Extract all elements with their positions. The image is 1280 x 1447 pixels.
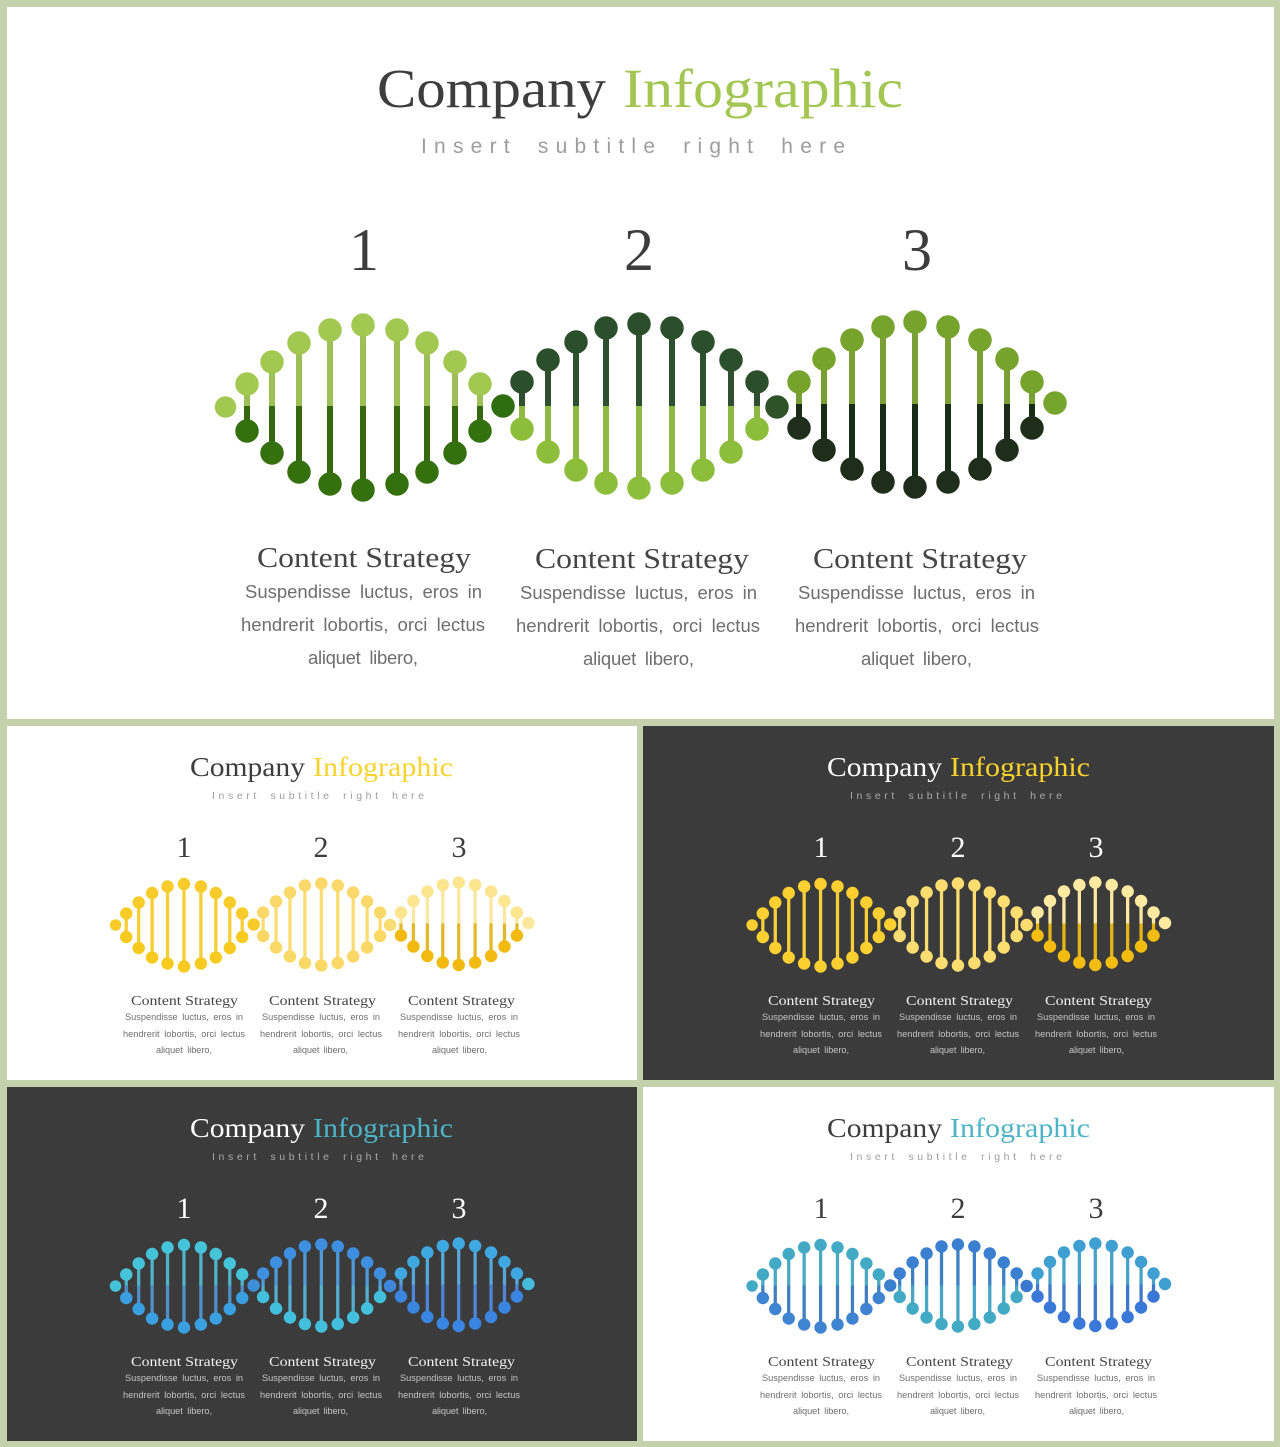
body 2: aliquet libero, [583,648,694,669]
number 1: 1 [349,217,379,283]
numbers: 3 [1088,831,1104,864]
column text: hendrerit lobortis, orci lectus [897,1029,1019,1039]
column text: hendrerit lobortis, orci lectus [398,1029,520,1039]
column text: Content Strategy [408,994,515,1009]
title: Infographic [950,751,1090,782]
numbers: 3 [1088,1192,1104,1225]
subtitle: Insert subtitle right here [850,1151,1062,1163]
column 2 text [516,544,760,669]
column text: Content Strategy [768,994,875,1009]
body 1: aliquet libero, [308,647,418,668]
DNA helix chart [752,1244,1165,1328]
body 1: hendrerit lobortis, orci lectus [241,614,485,635]
numbers [814,1192,1104,1225]
column text: Content Strategy [906,994,1013,1009]
numbers [814,831,1104,864]
column text: aliquet libero, [432,1406,487,1416]
column text: Content Strategy [131,994,238,1009]
numbers: 2 [314,1192,328,1225]
column text: Suspendisse luctus, eros in [262,1012,380,1022]
column text: hendrerit lobortis, orci lectus [398,1390,520,1400]
body 1: Suspendisse luctus, eros in [245,581,482,602]
column text: aliquet libero, [293,1406,348,1416]
panel: yellow on white [7,726,637,1080]
column text: Suspendisse luctus, eros in [400,1373,518,1383]
column text: hendrerit lobortis, orci lectus [123,1390,245,1400]
column text [123,994,520,1055]
DNA helix 3 [799,322,1055,487]
body 3: Suspendisse luctus, eros in [798,582,1035,603]
title: Company [190,751,305,782]
numbers: 1 [176,1192,192,1225]
numbers: 2 [950,1192,966,1225]
column text: aliquet libero, [1069,1406,1124,1416]
column text: Suspendisse luctus, eros in [899,1012,1017,1022]
title: Infographic [950,1112,1090,1143]
numbers [176,831,466,864]
numbers: 1 [814,1192,828,1225]
column text: Content Strategy [131,1355,238,1370]
title: Company [190,1112,305,1143]
panel: blue on white [643,1087,1274,1441]
column text: Content Strategy [269,1355,376,1370]
title: Infographic [313,751,453,782]
numbers: 1 [176,831,192,864]
column text: Content Strategy [408,1355,515,1370]
title: Infographic [623,58,903,119]
column text: aliquet libero, [930,1406,985,1416]
column text: hendrerit lobortis, orci lectus [1035,1390,1157,1400]
column 1 text [241,543,485,668]
column text: aliquet libero, [293,1045,348,1055]
column text: Content Strategy [906,1355,1013,1370]
numbers: 1 [814,831,828,864]
column text: hendrerit lobortis, orci lectus [123,1029,245,1039]
column text: Suspendisse luctus, eros in [1037,1012,1155,1022]
subtitle: Insert subtitle right here [212,1151,424,1163]
column text: Suspendisse luctus, eros in [125,1012,243,1022]
title: Infographic [313,1112,453,1143]
body 2: Suspendisse luctus, eros in [520,582,757,603]
numbers: 2 [950,831,966,864]
column 3 text [795,544,1039,669]
subtitle: Insert subtitle right here [421,135,845,158]
heading 3: Content Strategy [813,544,1027,575]
column text: Suspendisse luctus, eros in [1037,1373,1155,1383]
column text: aliquet libero, [432,1045,487,1055]
column text: aliquet libero, [793,1406,849,1416]
DNA helix chart [116,882,528,966]
column text: hendrerit lobortis, orci lectus [260,1390,382,1400]
column text: hendrerit lobortis, orci lectus [760,1029,882,1039]
panel: yellow on dark [643,726,1274,1080]
numbers [176,1192,466,1225]
column text: aliquet libero, [793,1045,849,1055]
DNA helix chart [116,1244,528,1328]
numbers: 3 [452,831,466,864]
DNA helix 1 [226,325,503,490]
column text: Content Strategy [1045,994,1152,1009]
body 3: aliquet libero, [861,648,972,669]
number 3: 3 [902,217,932,283]
title: Company [827,1112,942,1143]
column text: aliquet libero, [930,1045,985,1055]
column text: Content Strategy [768,1355,875,1370]
subtitle: Insert subtitle right here [212,790,424,802]
column text: hendrerit lobortis, orci lectus [1035,1029,1157,1039]
column text [760,1355,1157,1416]
column text: aliquet libero, [156,1045,212,1055]
column text: Suspendisse luctus, eros in [762,1012,880,1022]
panel: blue on dark [7,1087,637,1441]
column text: Suspendisse luctus, eros in [400,1012,518,1022]
column text: hendrerit lobortis, orci lectus [897,1390,1019,1400]
column text: Suspendisse luctus, eros in [262,1373,380,1383]
number 2: 2 [624,217,654,283]
column text [760,994,1157,1055]
title: Company [377,58,607,119]
column text: Content Strategy [269,994,376,1009]
column text: Content Strategy [1045,1355,1152,1370]
column text: hendrerit lobortis, orci lectus [260,1029,382,1039]
column text: Suspendisse luctus, eros in [125,1373,243,1383]
heading 2: Content Strategy [535,544,749,575]
heading 1: Content Strategy [257,543,471,574]
column text: hendrerit lobortis, orci lectus [760,1390,882,1400]
column text: Suspendisse luctus, eros in [899,1373,1017,1383]
column text: Suspendisse luctus, eros in [762,1373,880,1383]
body 3: hendrerit lobortis, orci lectus [795,615,1039,636]
subtitle: Insert subtitle right here [850,790,1062,802]
numbers: 3 [452,1192,466,1225]
body 2: hendrerit lobortis, orci lectus [516,615,760,636]
column text: aliquet libero, [1069,1045,1124,1055]
DNA helix chart [752,882,1165,966]
column text [123,1355,520,1416]
numbers: 2 [314,831,328,864]
title: Company [827,751,942,782]
panel: main green slide [7,7,1274,719]
DNA helix 2 [522,324,777,488]
column text: aliquet libero, [156,1406,212,1416]
